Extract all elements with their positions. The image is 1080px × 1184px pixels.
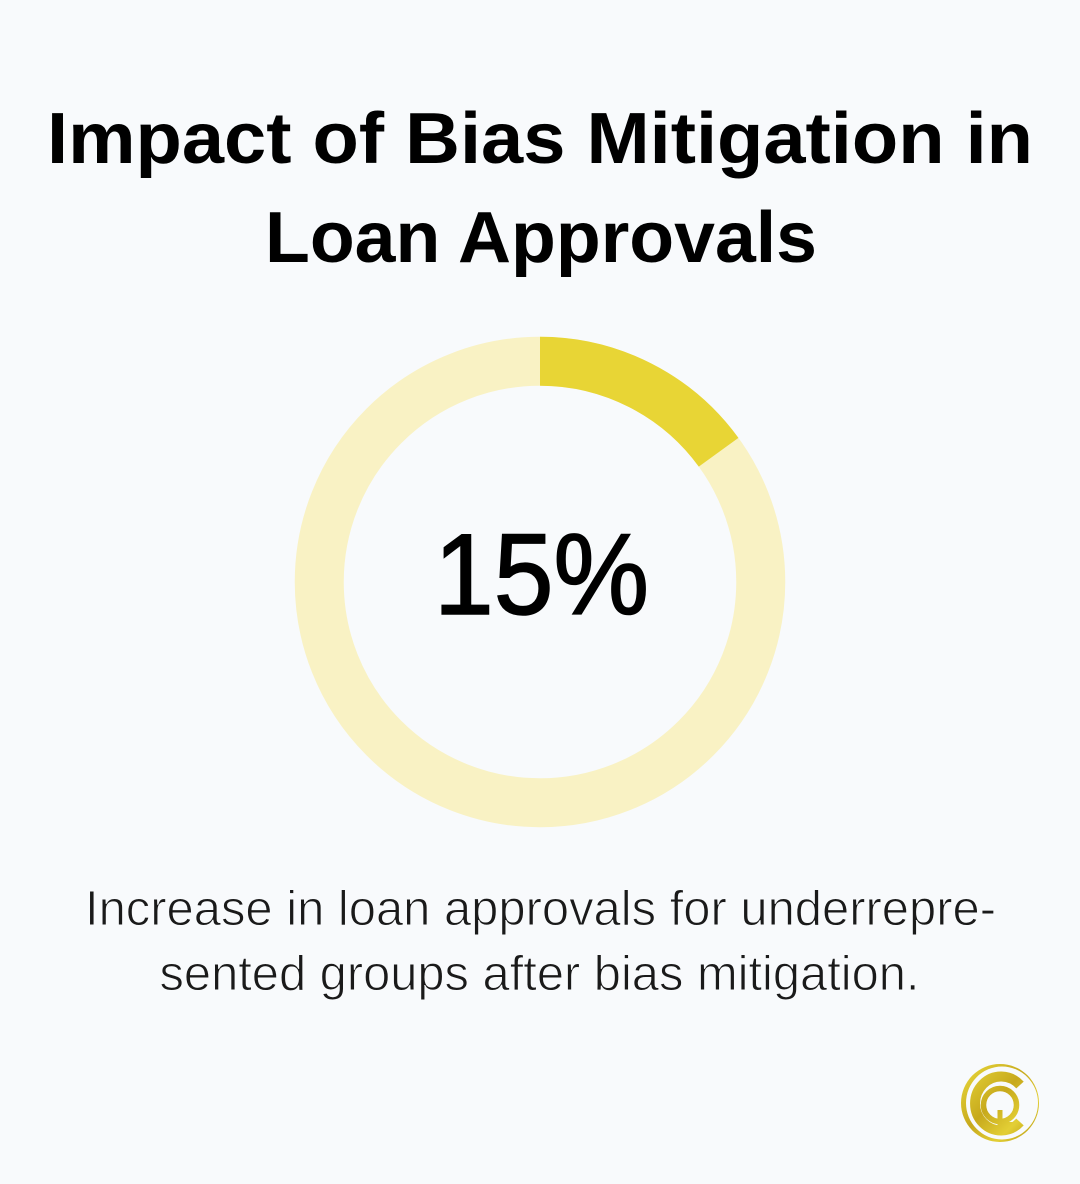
logo outer crescent ring: [961, 1064, 1039, 1142]
caption: [85, 882, 996, 1001]
logo letter C: [975, 1076, 1020, 1130]
logo Q stem: [1000, 1110, 1020, 1126]
title: Loan Approvals: [265, 198, 817, 278]
title: Impact of Bias Mitigation in: [47, 99, 1033, 179]
title: [47, 99, 1033, 278]
center value: 15%: [434, 511, 649, 639]
icon: gold logo: [961, 1064, 1039, 1142]
donut track: [319, 361, 761, 803]
donut chart: 15%: [319, 361, 761, 803]
caption: sented groups after bias mitigation.: [160, 947, 920, 1001]
donut highlighted segment: [540, 361, 719, 452]
caption: Increase in loan approvals for underrepre-: [85, 882, 996, 936]
logo letter Q: [984, 1088, 1016, 1122]
